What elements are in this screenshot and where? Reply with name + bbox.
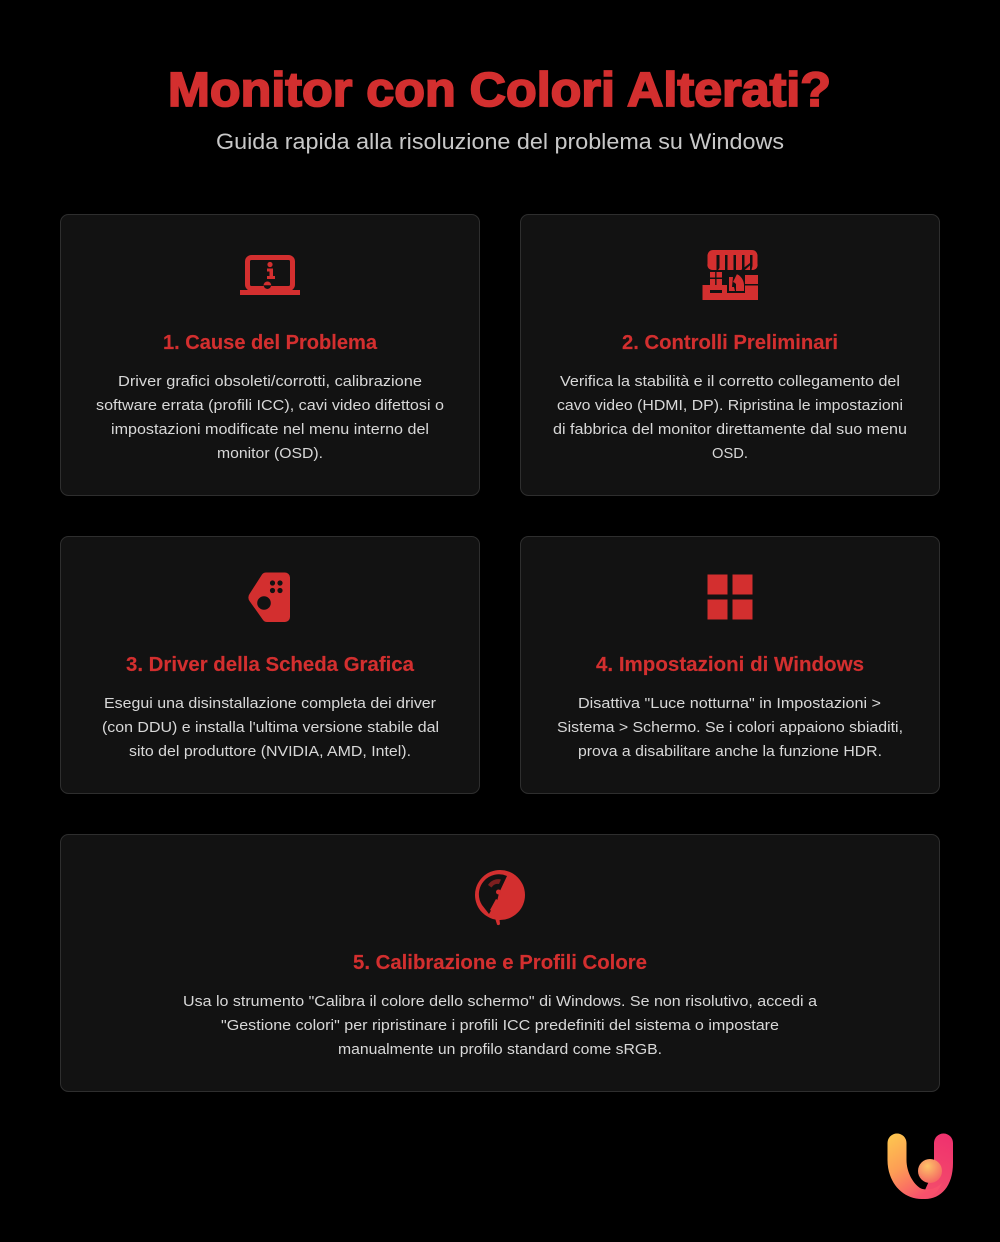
- text block: "Gestione colori" per ripristinare i profili ICC predefiniti del sistema o impostare: [221, 1017, 779, 1034]
- text block: (con DDU) e installa l'ultima versione stabile dal: [102, 719, 439, 736]
- text block: Driver grafici obsoleti/corrotti, calibrazione: [118, 373, 422, 390]
- panel: 4. windows: [520, 536, 940, 794]
- heading: 3. Driver della Scheda Grafica: [126, 654, 415, 676]
- text block: Disattiva "Luce notturna" in Impostazioni >: [578, 695, 881, 712]
- text block: cavo video (HDMI, DP). Ripristina le impostazioni: [557, 397, 903, 414]
- text block: [553, 373, 907, 462]
- text block: [557, 695, 903, 760]
- icon: shop with tool: [702, 250, 758, 300]
- heading: 1. Cause del Problema: [163, 332, 378, 354]
- text block: [96, 373, 444, 462]
- panel: 2. controlli: [520, 214, 940, 496]
- heading: 5. Calibrazione e Profili Colore: [353, 952, 647, 974]
- text block: prova a disabilitare anche la funzione HDR.: [578, 743, 882, 760]
- panel: 3. driver: [60, 536, 480, 794]
- heading: 4. Impostazioni di Windows: [596, 654, 864, 676]
- icon: colour palette circle: [475, 870, 525, 925]
- text block: monitor (OSD).: [217, 445, 323, 462]
- panel: 1. cause: [60, 214, 480, 496]
- text block: sito del produttore (NVIDIA, AMD, Intel).: [129, 743, 411, 760]
- heading: 2. Controlli Preliminari: [622, 332, 838, 354]
- title: Monitor con Colori Alterati?: [168, 64, 831, 117]
- text block: Esegui una disinstallazione completa dei driver: [104, 695, 436, 712]
- logo: [888, 1134, 953, 1199]
- text block: manualmente un profilo standard come sRGB.: [338, 1041, 662, 1058]
- icon: laptop with info: [240, 258, 300, 295]
- icon: graphics card tag: [248, 572, 290, 622]
- text block: Usa lo strumento "Calibra il colore dello schermo" di Windows. Se non risolutivo, accedi a: [183, 993, 818, 1010]
- panel: 5. calibrazione: [60, 834, 940, 1092]
- text block: Verifica la stabilità e il corretto collegamento del: [560, 373, 900, 390]
- text block: di fabbrica del monitor direttamente dal suo menu: [553, 421, 907, 438]
- text block: software errata (profili ICC), cavi video difettosi o: [96, 397, 444, 414]
- subtitle: Guida rapida alla risoluzione del problema su Windows: [216, 129, 784, 154]
- text block: Sistema > Schermo. Se i colori appaiono sbiaditi,: [557, 719, 903, 736]
- text block: [183, 993, 818, 1058]
- icon: windows grid: [708, 574, 752, 620]
- text block: [102, 695, 439, 760]
- text block: impostazioni modificate nel menu interno del: [111, 421, 429, 438]
- text block: OSD.: [712, 445, 748, 462]
